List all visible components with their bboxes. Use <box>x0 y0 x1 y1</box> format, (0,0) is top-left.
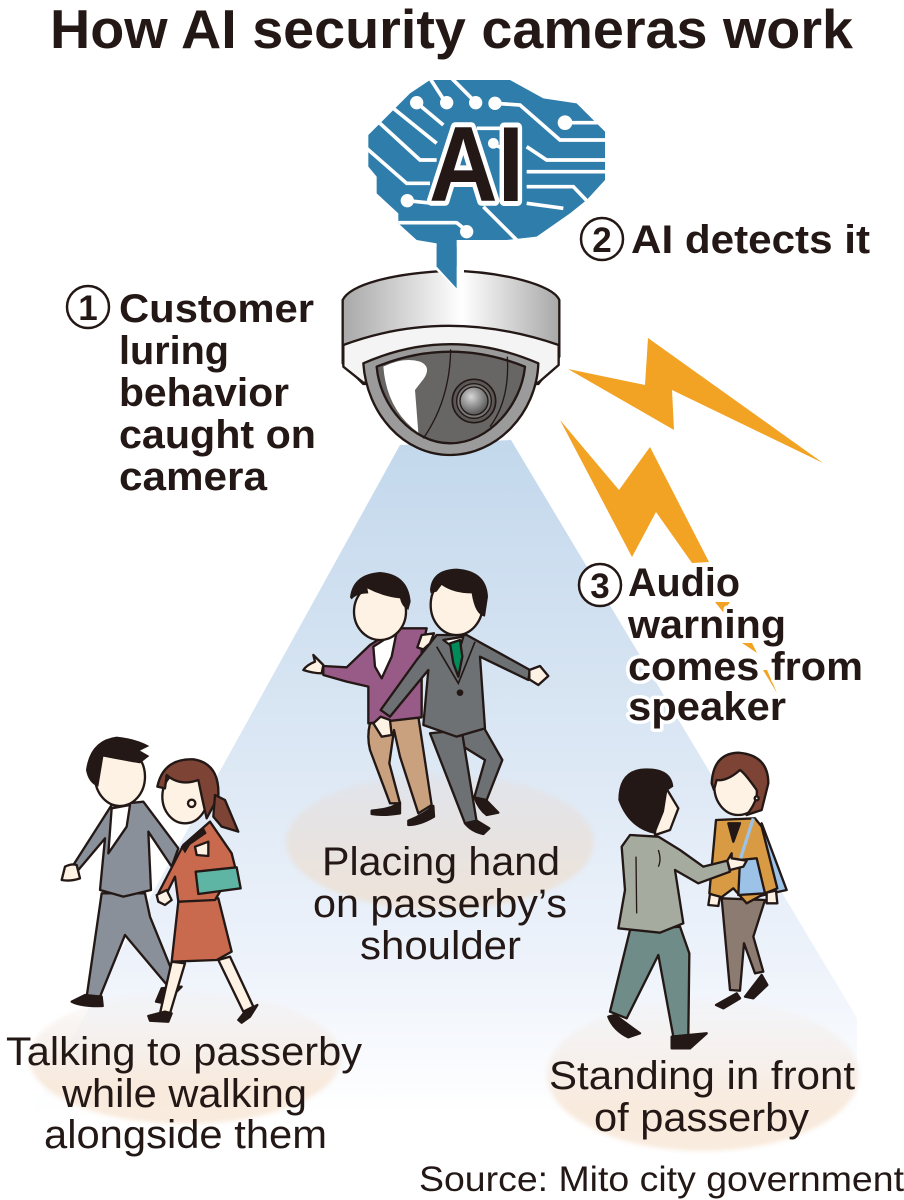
camera view cone <box>29 440 859 1151</box>
caption: talking while walking: Talking to passerby <box>6 1030 362 1074</box>
number 1 badge <box>67 286 109 328</box>
step 1 label: Customer <box>119 287 314 331</box>
caption: talking while walking: while walking <box>61 1072 307 1116</box>
step 1 label: behavior <box>119 371 289 415</box>
security camera <box>343 247 559 455</box>
caption: placing hand on shoulder <box>313 840 567 968</box>
figures: standing in front <box>608 753 787 1048</box>
caption: placing hand on shoulder: shoulder <box>360 924 521 968</box>
step 2 label: AI detects it <box>631 218 870 262</box>
step 1 label <box>67 286 316 499</box>
number 3 badge: 3 <box>590 567 610 606</box>
caption: placing hand on shoulder: on passerby’s <box>313 882 567 926</box>
caption: talking while walking <box>6 1030 362 1157</box>
figures: walking alongside <box>62 737 257 1023</box>
caption: placing hand on shoulder: Placing hand <box>322 840 560 884</box>
lightning bolts <box>560 338 823 693</box>
caption: standing in front <box>549 1054 855 1140</box>
number 2 badge <box>581 218 623 260</box>
step 1 label: caught on <box>119 413 316 457</box>
figures: hand on shoulder <box>303 569 548 834</box>
step 1 label: luring <box>119 329 229 373</box>
caption: standing in front: Standing in front <box>549 1054 855 1098</box>
caption: standing in front: of passerby <box>594 1096 809 1140</box>
step 3 label: warning <box>627 603 786 647</box>
step 3 label <box>579 561 863 729</box>
source note: Source: Mito city government <box>419 1160 904 1199</box>
step 3 label: Audio <box>628 561 740 605</box>
number 2 badge: 2 <box>592 221 612 260</box>
AI brain speech bubble <box>367 78 607 288</box>
AI label: AI <box>429 104 524 224</box>
caption: talking while walking: alongside them <box>44 1113 327 1157</box>
step 3 label: comes from <box>628 645 863 689</box>
number 1 badge: 1 <box>78 289 98 328</box>
number 3 badge <box>579 564 621 606</box>
step 3 label: speaker <box>628 685 786 729</box>
step 1 label: camera <box>119 455 268 499</box>
